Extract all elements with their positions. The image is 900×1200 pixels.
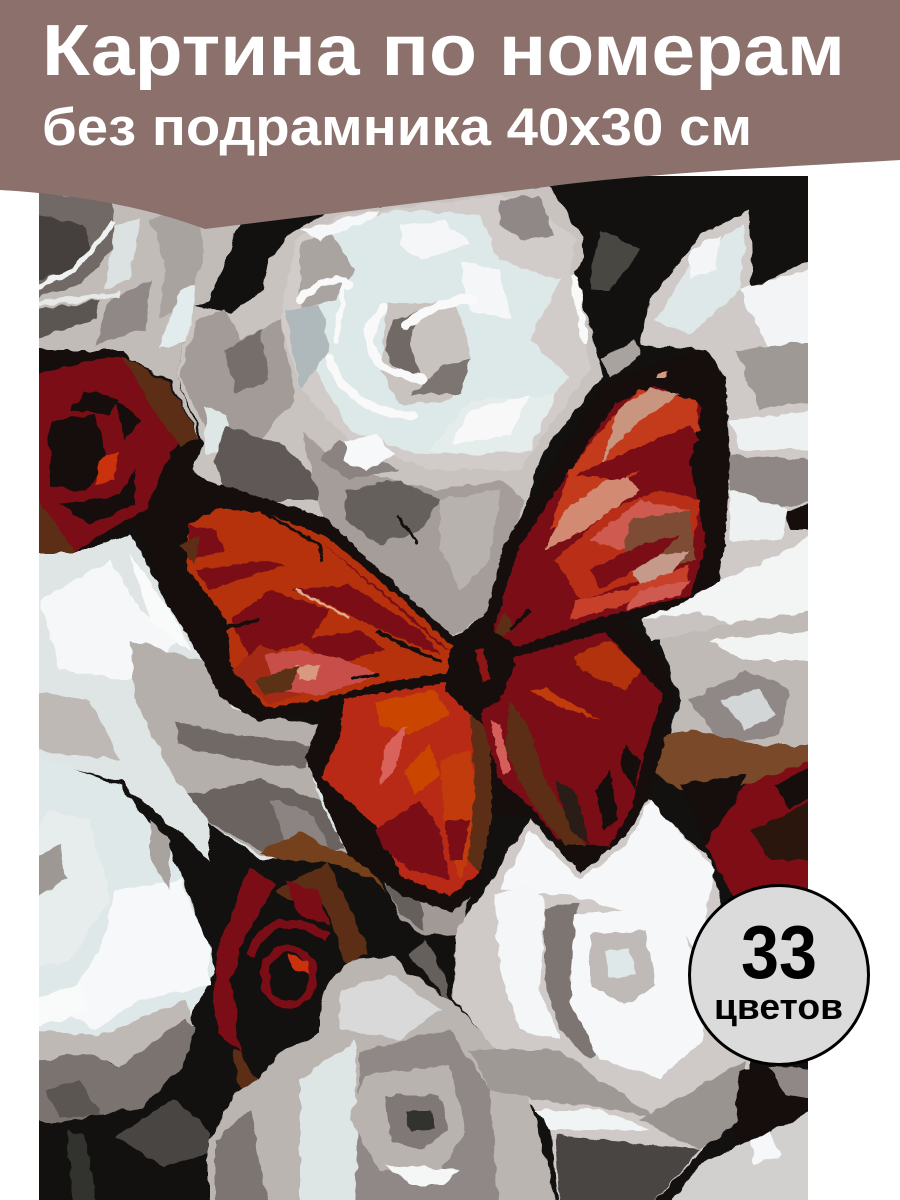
rose: dark red lower — [213, 832, 387, 1090]
badge number: 33 — [741, 910, 817, 994]
badge: colour count — [690, 886, 868, 1064]
butterfly: lower right wing — [480, 632, 663, 847]
rose: large centre top — [177, 186, 603, 640]
butterfly: body — [445, 625, 515, 715]
butterfly: lower left wing — [321, 683, 492, 896]
painting: butterfly on roses — [30, 176, 825, 1200]
rose: bottom right — [454, 799, 825, 1200]
rose: dark red upper left — [30, 350, 200, 553]
rose: bottom centre — [209, 957, 560, 1200]
roses: right middle — [640, 530, 825, 900]
badge label: цветов — [714, 986, 843, 1027]
butterfly — [130, 351, 730, 912]
rose: left middle — [30, 533, 348, 1122]
grey petals under butterfly — [384, 882, 471, 1000]
butterfly: black wing outline — [130, 351, 730, 912]
rose: top left — [39, 193, 240, 440]
title: Картина по номерам — [42, 11, 845, 91]
rose: upper right — [590, 210, 825, 590]
butterfly: upper left wing — [180, 508, 453, 708]
banner: brown header — [0, 0, 900, 229]
stroke on grey petal — [397, 515, 418, 544]
subtitle: без подрамника 40х30 см — [42, 98, 752, 157]
dark petals: bottom left — [66, 1100, 209, 1200]
butterfly: upper right wing — [492, 371, 706, 647]
